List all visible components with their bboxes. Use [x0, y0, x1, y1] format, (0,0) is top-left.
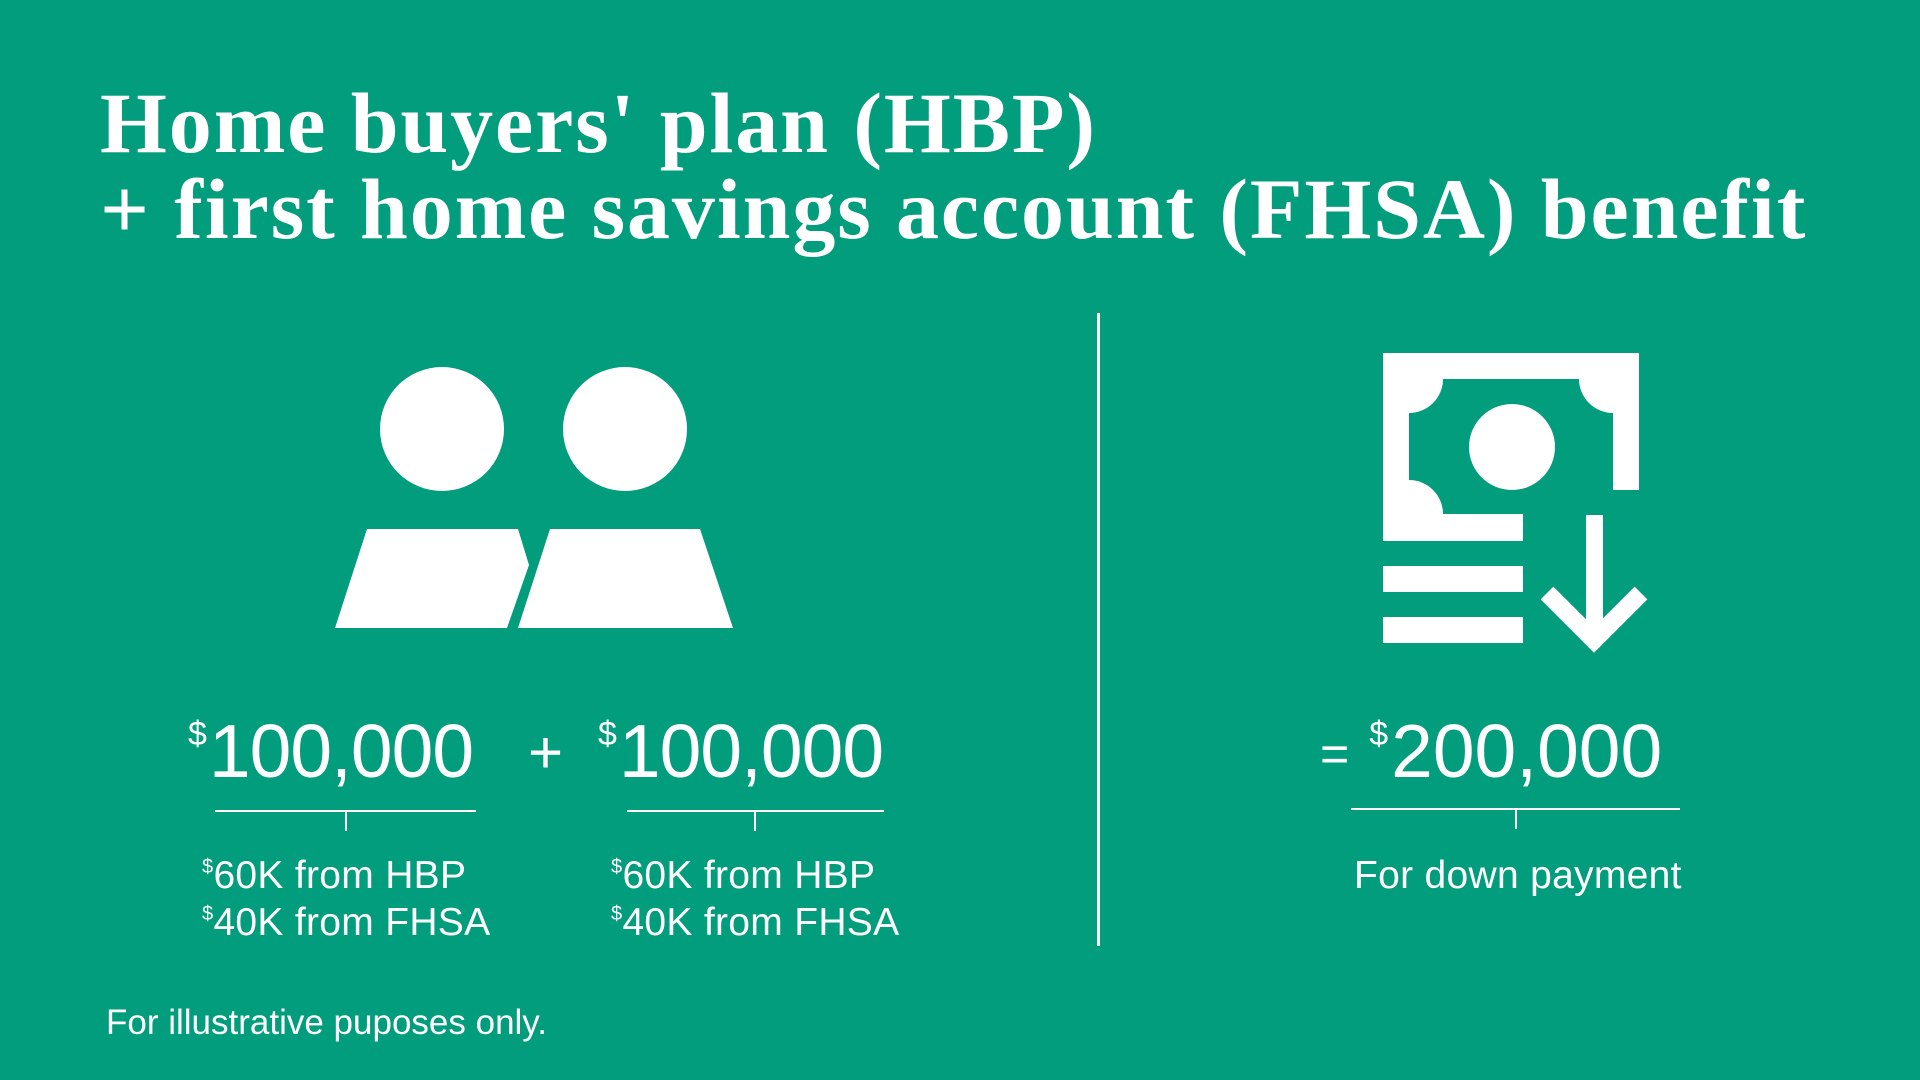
- breakdown 1: $40K from FHSA: [202, 901, 490, 944]
- amount 2: $100,000: [598, 709, 883, 793]
- title: Home buyers' plan (HBP): [100, 75, 1097, 171]
- breakdown 1: [202, 854, 490, 944]
- title: [100, 75, 1807, 257]
- footnote: For illustrative puposes only.: [106, 1003, 547, 1042]
- breakdown 2: $60K from HBP: [611, 854, 875, 897]
- plus: +: [528, 719, 563, 786]
- amount 1: $100,000: [188, 709, 473, 793]
- breakdown 2: [611, 854, 899, 944]
- breakdown 1: $60K from HBP: [202, 854, 466, 897]
- title: + first home savings account (FHSA) benefit: [100, 161, 1807, 257]
- breakdown 2: $40K from FHSA: [611, 901, 899, 944]
- divider: [1097, 313, 1100, 946]
- total label: For down payment: [1354, 854, 1682, 897]
- amount total: = $200,000: [1320, 709, 1662, 793]
- icon: money with down arrow: [1383, 353, 1648, 653]
